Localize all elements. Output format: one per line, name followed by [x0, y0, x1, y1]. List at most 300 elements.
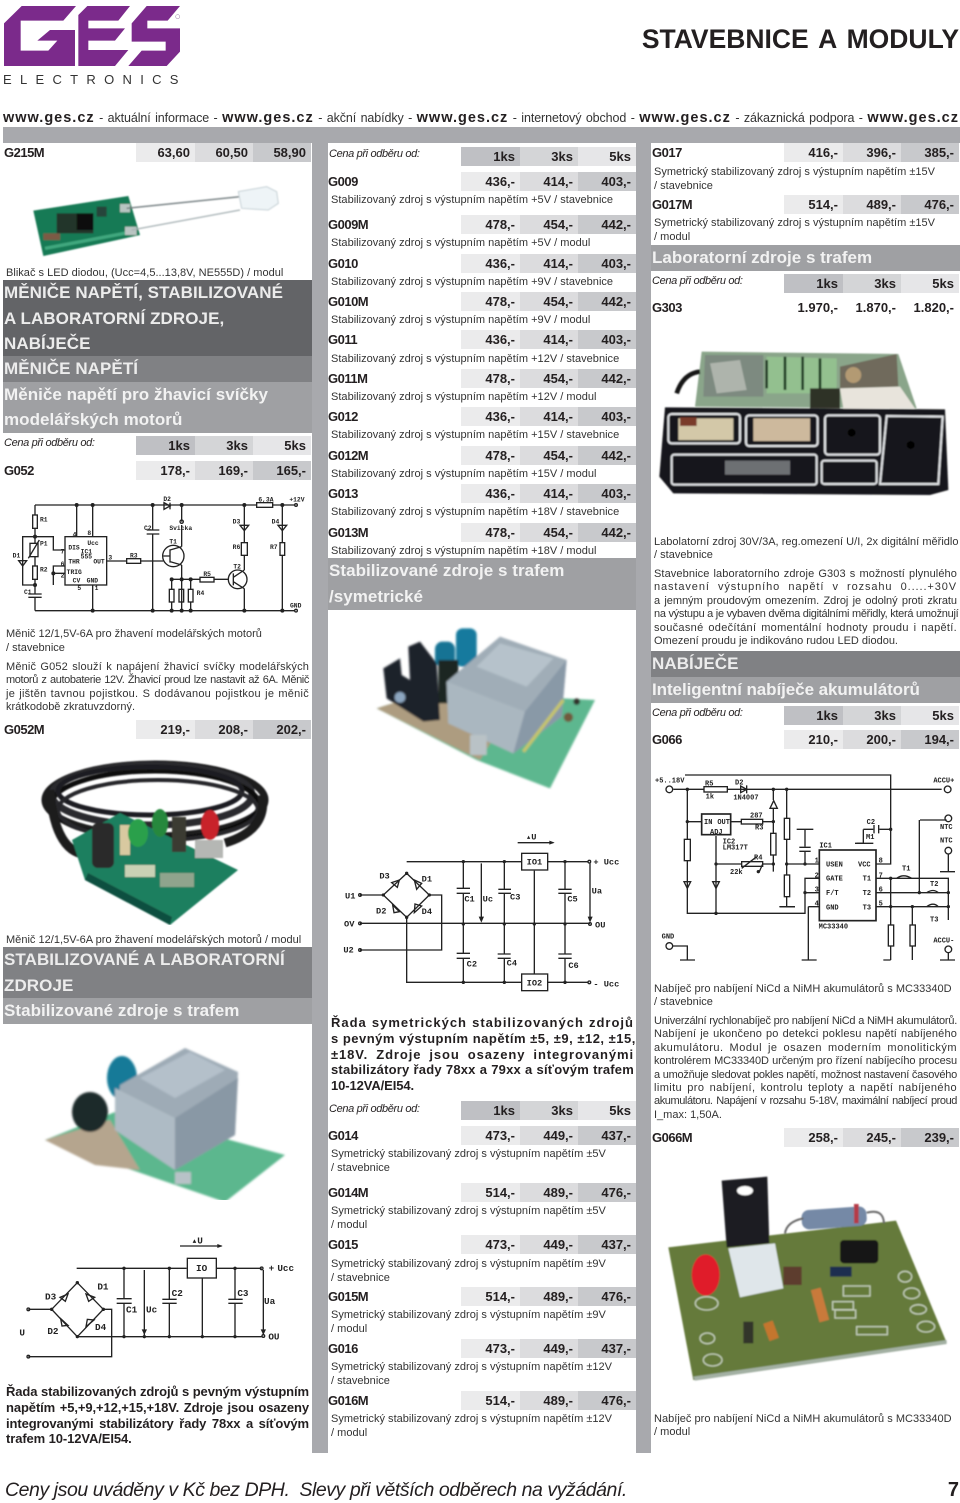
schematic: single output stabilised supply: D2: [47, 1326, 59, 1337]
caption: G066M: Nabíječ pro nabíjení NiCd a NiMH akumulátorů s MC33340D: [654, 1413, 952, 1425]
schematic: G066 charger: IC1: [819, 842, 832, 850]
schematic: symmetric supply: C5: [567, 894, 578, 904]
price row: G016M: [328, 1391, 636, 1410]
price row: G052M: 208,-: [218, 722, 248, 737]
schematic: symmetric supply: C4: [507, 958, 517, 968]
schematic: G066 charger: IC2: [723, 838, 735, 846]
price row: G009M: 442,-: [601, 217, 631, 232]
price row: G017M: 514,-: [808, 197, 838, 212]
description: G014M: Symetrický stabilizovaný zdroj s výstupním napětím ±5V: [331, 1205, 606, 1217]
description: single output supplies: napětím +5,+9,+12,+15,+18V. Zdroje jsou osazeny: [6, 1400, 309, 1415]
schematic: G066 charger: GATE: [826, 876, 843, 884]
description: symmetric supplies: 10-12VA/EI54.: [331, 1078, 414, 1093]
schematic: G052 converter: T2: [233, 564, 241, 571]
heading: category line 1: [3, 280, 312, 306]
price row: G012: 436,-: [485, 409, 515, 424]
logo wordmark: ELECTRONICS: [3, 72, 187, 87]
description: G017M: / modul: [654, 230, 690, 242]
price header: Cena při odběru od:: [329, 148, 420, 160]
schematic: G052 converter: R2: [40, 567, 48, 574]
price row: G052M: G052M: [4, 722, 44, 737]
schematic: symmetric supply: ▴U: [526, 832, 536, 842]
schematic: symmetric supply: - Ucc: [593, 980, 619, 990]
price row: G015M: [328, 1287, 636, 1306]
schematic: single output stabilised supply: OU: [268, 1331, 280, 1342]
price row: G015M: 514,-: [485, 1289, 515, 1304]
heading: transformer supplies line 1: Stabilizované zdroje s trafem: [329, 561, 564, 580]
price row: G011: [328, 330, 636, 349]
heading: transformer supplies: Stabilizované zdroje s trafem: [4, 1001, 239, 1020]
price header: 1ks: [493, 149, 515, 164]
price row: G014M: 514,-: [485, 1185, 515, 1200]
price row: G052: G052: [4, 463, 34, 478]
schematic: G052 converter: GND: [290, 602, 302, 609]
schematic: G066 charger: 8: [879, 858, 883, 866]
price row: G017M: G017M: [652, 197, 692, 212]
description: G010: Stabilizovaný zdroj s výstupním napětím +9V / stavebnice: [331, 276, 613, 288]
schematic: G066 charger: GND: [826, 904, 839, 912]
price row: G010M: G010M: [328, 294, 368, 309]
description: G066: Nabíjení je ukončeno po detekci poklesu napětí nabíjeného: [654, 1028, 957, 1040]
schematic: G066 charger: F/T: [826, 890, 839, 898]
schematic: G066 charger: MC33340: [819, 923, 848, 931]
schematic: symmetric supply: [343, 832, 619, 992]
description: G015: / stavebnice: [331, 1272, 390, 1284]
schematic: G052 converter: 6: [61, 561, 65, 568]
description: G017: [654, 166, 935, 193]
price row: G215M: [4, 143, 311, 162]
caption: LED flasher: Blikač s LED diodou, (Ucc=4,5...13,8V, NE555D) / modul: [6, 267, 283, 279]
price header: Cena při odběru od:: [652, 275, 743, 287]
description: G052: Měnič G052 slouží k napájení žhavicí svíčky modelářských: [6, 661, 309, 673]
schematic: G052 converter: C1: [24, 589, 32, 596]
schematic: G066 charger: 22k: [730, 869, 743, 877]
description: G012: Stabilizovaný zdroj s výstupním napětím +15V / stavebnice: [331, 429, 619, 441]
description: G066: a umožňuje sledovat pokles napětí, možnost nastavení časového: [654, 1069, 957, 1081]
price row: G014: 473,-: [485, 1128, 515, 1143]
schematic: G066 charger: +5..18V: [655, 778, 685, 786]
heading: stabilised and laboratory sources line 1: STABILIZOVANÉ A LABORATORNÍ: [4, 950, 285, 969]
price row: G215M: 58,90: [273, 145, 306, 160]
price row: G016M: 514,-: [485, 1393, 515, 1408]
description: G066: kontrolérem MC33340D určeným pro řízení nabíjecího procesu: [654, 1055, 957, 1067]
price row: G010: 403,-: [601, 256, 631, 271]
schematic: G052 converter: D3: [233, 518, 240, 525]
schematic: single output stabilised supply: [19, 1235, 295, 1359]
description: G015: [331, 1258, 606, 1284]
price row: G215M: 60,50: [215, 145, 248, 160]
price header: 1ks: [816, 708, 838, 723]
price row: G016: 437,-: [601, 1341, 631, 1356]
description: G017M: [654, 217, 935, 244]
price row: G013: G013: [328, 486, 358, 501]
description: G015: Symetrický stabilizovaný zdroj s výstupním napětím ±9V: [331, 1258, 606, 1270]
description: symmetric supplies: Řada symetrických stabilizovaných zdrojů: [331, 1015, 634, 1030]
price row: G066M: G066M: [652, 1130, 692, 1145]
schematic: G066 charger: T2: [930, 881, 938, 889]
price row: G012M: G012M: [328, 448, 368, 463]
description: G017: Symetrický stabilizovaný zdroj s výstupním napětím ±15V: [654, 166, 935, 178]
schematic: G052 converter: R3: [130, 553, 138, 560]
schematic: symmetric supply: IO2: [527, 978, 542, 988]
price row: G066M: 258,-: [808, 1130, 838, 1145]
price row: G052: 178,-: [160, 463, 190, 478]
schematic: symmetric supply: C6: [568, 961, 579, 971]
price header: 1ks: [168, 438, 190, 453]
description: G052: je jištěn tavnou pojistkou. S dodávanou pojistkou je měnič: [6, 688, 309, 700]
photo: G066M charger module: [640, 1160, 960, 1410]
schematic: G052 converter: GND: [87, 578, 98, 585]
price header: Cena při odběru od:: [4, 437, 95, 449]
logo: GES Electronics: [3, 6, 187, 87]
schematic: G066 charger: VCC: [858, 862, 871, 870]
price row: G066M: [651, 1128, 959, 1147]
schematic: G066 charger: R5: [705, 780, 713, 788]
schematic: G052 converter: 2: [61, 572, 65, 579]
price row: G014M: 476,-: [601, 1185, 631, 1200]
price row: G011: G011: [328, 332, 357, 347]
schematic: G066 charger: LM317T: [723, 844, 748, 852]
price row: G015M: 489,-: [543, 1289, 573, 1304]
price row: G009: 414,-: [543, 174, 573, 189]
caption type: kit: / stavebnice: [654, 549, 713, 561]
description: symmetric supplies: stabilizátory řady 78xx a 79xx a síťovým trafem: [331, 1062, 634, 1077]
schematic: G066 charger: NTC: [940, 824, 953, 832]
description: G303: nastavení výstupního napětí v rozsahu 0.....+30V: [654, 581, 957, 593]
price header: 3ks: [874, 276, 896, 291]
description: G010M: Stabilizovaný zdroj s výstupním napětím +9V / modul: [331, 314, 590, 326]
schematic: G052 converter: R5: [203, 571, 211, 578]
price row: G052M: 219,-: [160, 722, 190, 737]
price row: G011M: 442,-: [601, 371, 631, 386]
price row: G016: 473,-: [485, 1341, 515, 1356]
schematic: G052 converter: P1: [40, 541, 48, 548]
schematic: symmetric supply: IO1: [527, 858, 542, 868]
panel: column 3: [651, 143, 960, 1453]
schematic: G052 converter: +12V: [289, 497, 305, 504]
price row: G009: 436,-: [485, 174, 515, 189]
price row: G012: 414,-: [543, 409, 573, 424]
photo: LED flasher module: [32, 186, 280, 257]
price row: G066M: 239,-: [924, 1130, 954, 1145]
caption: G052M: Měnič 12/1,5V-6A pro žhavení modelářských motorů / modul: [6, 934, 301, 946]
description: G014: / stavebnice: [331, 1162, 390, 1174]
schematic: symmetric supply: D2: [376, 906, 386, 916]
price row: G013M: G013M: [328, 525, 368, 540]
price row: G012M: [328, 446, 636, 465]
description: G052: krátkodobě zkratuvzdorný.: [6, 701, 135, 713]
heading: category line 3: [3, 331, 312, 357]
schematic: G052 converter: C2: [144, 525, 152, 532]
price row: G011M: 478,-: [485, 371, 515, 386]
heading: stabilised and laboratory sources line 2: ZDROJE: [4, 976, 73, 994]
description: G011M: Stabilizovaný zdroj s výstupním napětím +12V / modul: [331, 391, 596, 403]
schematic: G052 converter: 1: [95, 585, 99, 592]
price row: G052M: 202,-: [276, 722, 306, 737]
schematic: G066 charger: 1k: [706, 793, 714, 801]
description: G303: a jemným proudovým omezením. Zdroj je odolný proti zkratu: [654, 595, 957, 607]
description: symmetric supplies: ±18V. Zdroje jsou osazeny integrovanými: [331, 1047, 634, 1062]
price header: Cena při odběru od:: [329, 1103, 420, 1115]
price row: G013M: 478,-: [485, 525, 515, 540]
schematic: G052 converter: R1: [40, 516, 48, 523]
caption: G066: Nabíječ pro nabíjení NiCd a NiMH akumulátorů s MC33340D: [654, 983, 952, 995]
schematic: G066 charger: 4: [815, 900, 819, 908]
price row: G011: 403,-: [601, 332, 631, 347]
schematic: G052 converter: 5: [77, 585, 81, 592]
price row: G013M: 454,-: [543, 525, 573, 540]
schematic: G066 charger: ADJ: [710, 829, 723, 837]
price header: 3ks: [226, 438, 248, 453]
price header: 5ks: [284, 438, 306, 453]
schematic: single output stabilised supply: Ua: [264, 1296, 276, 1307]
description: G015M: [331, 1309, 606, 1334]
price header: [329, 1101, 636, 1120]
schematic: G066 charger: T3: [930, 916, 938, 924]
logo mark: [4, 6, 180, 66]
schematic: symmetric supply: Uc: [483, 894, 493, 904]
description: G016M: Symetrický stabilizovaný zdroj s výstupním napětím ±12V: [331, 1413, 612, 1425]
price row: G012: 403,-: [601, 409, 631, 424]
price row: G066: [651, 730, 959, 749]
price row: G010: G010: [328, 256, 358, 271]
schematic: symmetric supply: Ua: [592, 886, 602, 896]
description: G066: I_max: 1,50A.: [654, 1109, 722, 1121]
schematic: symmetric supply: C1: [464, 894, 475, 904]
schematic: G052 converter: 6,3A: [258, 496, 274, 503]
schematic: G052 converter: R4: [197, 590, 204, 597]
price row: G012: [328, 407, 636, 426]
schematic: G052 converter: D1: [13, 553, 20, 560]
description: symmetric supplies: [331, 1015, 636, 1093]
description: G016M: [331, 1413, 612, 1440]
description: G017: / stavebnice: [654, 180, 713, 192]
schematic: G066 charger: T2: [863, 890, 871, 898]
price row: G013M: 442,-: [601, 525, 631, 540]
price row: G009M: 478,-: [485, 217, 515, 232]
heading: stabilised and laboratory sources line 2: [3, 972, 312, 998]
price row: G017: [651, 143, 959, 162]
price row: G009M: [328, 215, 636, 234]
price row: G303: [651, 298, 959, 317]
heading: glow plug converters line 1: [3, 382, 312, 408]
price row: G052: 165,-: [276, 463, 306, 478]
price header: 3ks: [551, 149, 573, 164]
price row: G066: G066: [652, 732, 682, 747]
price row: G009M: 454,-: [543, 217, 573, 232]
heading: intelligent chargers: [651, 676, 960, 702]
schematic: G066 charger: ACCU+: [933, 778, 954, 786]
heading: laboratory sources: Laboratorní zdroje s trafem: [652, 248, 872, 267]
description: G066: limitu pro nabíjení, kontrolu teploty a napětí nabíjeného: [654, 1082, 957, 1094]
price row: G017M: 489,-: [866, 197, 896, 212]
price row: G052: [4, 461, 311, 480]
price row: G013: [328, 484, 636, 503]
price header: 5ks: [932, 276, 954, 291]
heading: voltage converters: MĚNIČE NAPĚTÍ: [4, 359, 138, 378]
schematic: G052 converter: CV: [73, 578, 80, 585]
heading: category line 2: A LABORATORNÍ ZDROJE,: [4, 308, 224, 328]
price row: G303: 1.970,-: [798, 300, 838, 315]
schematic: G066 charger: IN: [704, 819, 712, 827]
schematic: G052 converter: TRIG: [67, 569, 82, 576]
price row: G017M: [651, 195, 959, 214]
price row: G013: 436,-: [485, 486, 515, 501]
price row: G015M: 476,-: [601, 1289, 631, 1304]
price row: G009: [328, 172, 636, 191]
price row: G012: G012: [328, 409, 358, 424]
description: single output supplies: integrovanými stabilizátory řady 78xx a síťovým: [6, 1416, 309, 1431]
schematic: single output stabilised supply: Uc: [146, 1305, 158, 1316]
schematic: single output stabilised supply: D3: [45, 1291, 57, 1302]
price header: [651, 274, 959, 293]
price row: G010M: 454,-: [543, 294, 573, 309]
footer note: Ceny jsou uváděny v Kč bez DPH. Slevy při větších odběrech na vyžádání.: [5, 1479, 627, 1501]
price header: [329, 147, 636, 166]
schematic: G066 charger: R3: [755, 824, 763, 832]
schematic: G052 converter: D4: [272, 518, 279, 525]
schematic: symmetric supply: U2: [343, 946, 354, 956]
price row: G017: 385,-: [924, 145, 954, 160]
schematic: G052 converter: Ucc: [87, 540, 99, 547]
price row: G215M: 63,60: [157, 145, 190, 160]
price row: G014M: G014M: [328, 1185, 368, 1200]
description: G303: Omezení proudu je indikováno rudou LED diodou.: [654, 635, 898, 647]
schematic: symmetric supply: C2: [467, 960, 477, 970]
price row: G015M: G015M: [328, 1289, 368, 1304]
heading: chargers: NABÍJEČE: [652, 654, 739, 673]
schematic: G052 converter: THR: [68, 558, 80, 565]
schematic: single output stabilised supply: +: [269, 1263, 275, 1274]
description: G052: motorů z autobaterie 12V. Žhavicí proud lze nastavit až 6A. Měnič: [6, 674, 309, 686]
price row: G016: G016: [328, 1341, 358, 1356]
description: G066: akumulátoru. Modul je osazen moderním monolitickým: [654, 1042, 957, 1054]
schematic: single output stabilised supply: C1: [126, 1305, 138, 1316]
heading: transformer supplies line 1: [328, 558, 636, 584]
price row: G012M: 478,-: [485, 448, 515, 463]
schematic: symmetric supply: + Ucc: [593, 858, 619, 868]
price row: G017: G017: [652, 145, 682, 160]
schematic: symmetric supply: D1: [422, 874, 432, 884]
description: G016: [331, 1361, 612, 1386]
photo: symmetric supply: [376, 626, 596, 790]
schematic: G066 charger: M1: [866, 834, 874, 842]
description: G014M: / modul: [331, 1218, 367, 1230]
price row: G015: 449,-: [543, 1237, 573, 1252]
schematic: G066 charger: 5: [879, 900, 883, 908]
description: G011: Stabilizovaný zdroj s výstupním napětím +12V / stavebnice: [331, 353, 619, 365]
description: G017M: Symetrický stabilizovaný zdroj s výstupním napětím ±15V: [654, 217, 935, 229]
price row: G052M: [4, 720, 311, 739]
panel: column 2: [328, 143, 636, 1453]
price header: 1ks: [816, 276, 838, 291]
schematic: G052 converter: DIS: [68, 544, 80, 551]
description: G016: / stavebnice: [331, 1374, 390, 1386]
heading: glow plug converters line 1: Měniče napětí pro žhavicí svíčky: [4, 384, 268, 404]
description: G015M: Symetrický stabilizovaný zdroj s výstupním napětím ±9V: [331, 1309, 606, 1321]
price row: G014: 449,-: [543, 1128, 573, 1143]
caption type: module: / modul: [654, 1426, 690, 1438]
schematic: G066 charger: GND: [662, 933, 674, 941]
price row: G215M: G215M: [4, 145, 44, 160]
price row: G052: 169,-: [218, 463, 248, 478]
schematic: G066 charger: 6: [879, 887, 883, 895]
schematic: single output stabilised supply: C3: [237, 1288, 249, 1299]
schematic: symmetric supply: D4: [422, 907, 432, 917]
price row: G013: 414,-: [543, 486, 573, 501]
price row: G303: G303: [652, 300, 682, 315]
page title: STAVEBNICE A MODULY: [642, 24, 959, 54]
schematic: symmetric supply: U1: [345, 892, 355, 902]
price row: G010M: 478,-: [485, 294, 515, 309]
price row: G017: 396,-: [866, 145, 896, 160]
price row: G011: 414,-: [543, 332, 573, 347]
price row: G009M: G009M: [328, 217, 368, 232]
price row: G303: 1.870,-: [856, 300, 896, 315]
price row: G017M: 476,-: [924, 197, 954, 212]
heading: glow plug converters line 2: [3, 407, 312, 432]
schematic: G052 converter: D2: [163, 496, 171, 503]
price row: G011: 436,-: [485, 332, 515, 347]
description: symmetric supplies: s pevným výstupním napětím ±5, ±9, ±12, ±15,: [331, 1031, 636, 1046]
schematic: single output stabilised supply: C2: [172, 1288, 183, 1299]
price row: G015: [328, 1235, 636, 1254]
price row: G066M: 245,-: [866, 1130, 896, 1145]
price row: G010M: 442,-: [601, 294, 631, 309]
heading: category line 3: NABÍJEČE: [4, 334, 91, 353]
photo: G303 laboratory supply: [640, 330, 960, 530]
price header: 1ks: [493, 1103, 515, 1118]
description: single output supplies: Řada stabilizovaných zdrojů s pevným výstupním: [6, 1384, 309, 1399]
schematic: G052 converter: 7: [61, 548, 65, 555]
description: G303: současné odečítání momentální hodnoty proudu i napětí.: [654, 622, 957, 634]
price header: 5ks: [609, 149, 631, 164]
price row: G066: 200,-: [866, 732, 896, 747]
schematic: G052 converter: 555: [81, 554, 92, 561]
schematic: G066 charger: R4: [754, 854, 762, 862]
description: G303: Stavebnice laboratorního zdroje G303 s možností plynulého: [654, 568, 957, 580]
schematic: G052 converter: T1: [169, 538, 177, 545]
schematic: symmetric supply: OV: [344, 920, 355, 930]
price row: G066: 194,-: [924, 732, 954, 747]
schematic: G066 charger: T3: [863, 904, 871, 912]
price row: G303: 1.820,-: [914, 300, 954, 315]
schematic: G066 charger: 7: [879, 872, 883, 880]
schematic: single output stabilised supply: ▴U: [192, 1235, 203, 1246]
description: G066: akumulátoru. Napájení v rozsahu 5-18V, maximální nabíjecí proud: [654, 1095, 957, 1107]
description: G066: [654, 1015, 957, 1122]
heading: voltage converters: [3, 356, 312, 382]
price row: G010: [328, 254, 636, 273]
description: G052: [6, 661, 309, 713]
schematic: G066 charger: 1: [815, 858, 819, 866]
price header: Cena při odběru od:: [652, 707, 743, 719]
schematic: G066 charger: USEN: [826, 862, 843, 870]
heading: glow plug converters line 2: modelářských motorů: [4, 410, 182, 429]
page number: 7: [948, 1479, 959, 1501]
schematic: G066 charger: 1N4007: [733, 794, 759, 802]
price row: G016: 449,-: [543, 1341, 573, 1356]
price row: G011M: G011M: [328, 371, 367, 386]
schematic: G066 charger: T1: [863, 876, 871, 884]
price header: 5ks: [609, 1103, 631, 1118]
description: G015M: / modul: [331, 1322, 367, 1334]
price row: G009: 403,-: [601, 174, 631, 189]
description: G013M: Stabilizovaný zdroj s výstupním napětím +18V / modul: [331, 545, 596, 557]
price row: G010: 436,-: [485, 256, 515, 271]
description: G016: Symetrický stabilizovaný zdroj s výstupním napětím ±12V: [331, 1361, 612, 1373]
heading: transformer supplies line 2: /symetrické: [329, 587, 423, 606]
